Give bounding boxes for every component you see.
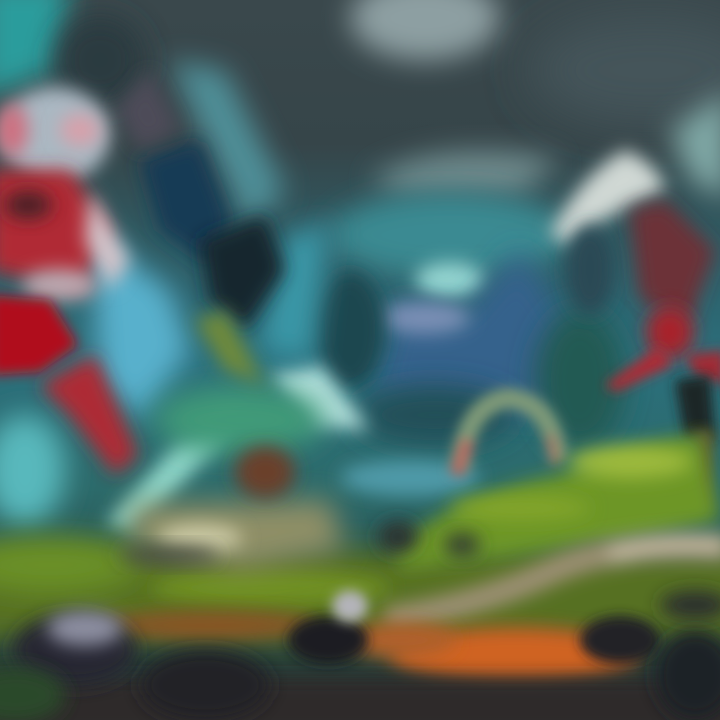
orange ground <box>0 611 720 720</box>
left red figure <box>0 87 138 475</box>
dark blue creature <box>115 70 285 385</box>
distant mountains <box>316 225 625 450</box>
right red figure <box>605 200 720 510</box>
dirt path <box>385 543 720 620</box>
clouds <box>0 0 720 298</box>
stone arch <box>456 398 558 475</box>
ground: meadow <box>0 446 720 640</box>
left pale blue glow <box>0 220 480 530</box>
foreground dark rocks <box>0 521 720 720</box>
green hill <box>395 435 720 570</box>
